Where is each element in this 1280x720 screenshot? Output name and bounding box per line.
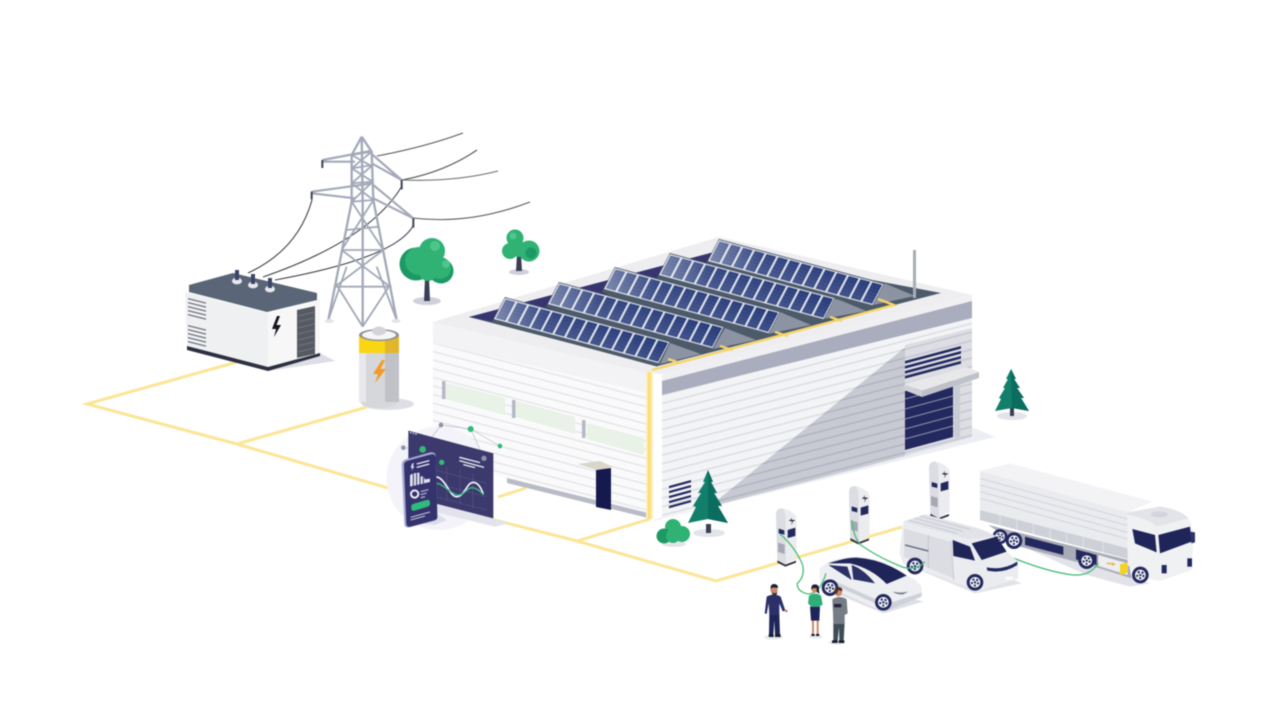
van shadow xyxy=(903,563,1022,593)
bush xyxy=(656,519,690,547)
person two xyxy=(808,584,823,638)
antenna xyxy=(913,250,916,298)
car xyxy=(819,557,922,612)
truck lights xyxy=(1162,565,1167,573)
right parapet xyxy=(662,295,972,395)
door frame xyxy=(954,374,960,438)
right wall xyxy=(662,318,972,519)
roof top xyxy=(433,237,972,374)
van wheels xyxy=(907,558,923,574)
phone shadow xyxy=(420,513,447,525)
right wall mid shade xyxy=(905,328,972,456)
wall posts xyxy=(442,381,586,438)
pine front xyxy=(688,470,728,537)
network nodes xyxy=(419,426,502,465)
charger one xyxy=(776,508,797,567)
right wall shadow xyxy=(709,336,919,507)
truck wheels xyxy=(992,529,1007,544)
entrance canopy xyxy=(578,461,613,470)
network links xyxy=(403,425,500,462)
van front stripe xyxy=(987,562,1017,572)
truck charging cable xyxy=(1012,557,1098,575)
left entrance door xyxy=(596,468,611,510)
window dots xyxy=(410,432,417,435)
van windows xyxy=(953,540,975,561)
left parapet xyxy=(433,322,648,393)
truck battery xyxy=(1098,555,1128,575)
truck cab xyxy=(1128,507,1193,581)
person one xyxy=(764,584,788,640)
window bands xyxy=(446,383,644,455)
pylon xyxy=(312,137,413,327)
left wall base xyxy=(507,478,648,518)
trailer side xyxy=(980,471,1128,559)
insulators xyxy=(232,270,275,292)
roof back navy edge xyxy=(469,251,745,323)
transformer shadow xyxy=(268,352,335,371)
charger three xyxy=(929,462,950,520)
pine right xyxy=(995,369,1029,420)
truck xyxy=(980,463,1195,583)
loading canopy xyxy=(904,367,979,397)
battery shadow xyxy=(362,398,414,410)
tree one xyxy=(400,238,454,305)
left wall xyxy=(433,343,648,517)
battery yellow band xyxy=(359,335,399,353)
wall yellow conduit xyxy=(646,371,653,519)
phone xyxy=(402,452,437,528)
loading door vent xyxy=(905,346,961,379)
wall vent lower xyxy=(669,480,691,508)
tree two xyxy=(502,230,540,275)
car windows xyxy=(828,558,907,584)
phone content xyxy=(410,461,430,520)
charger two xyxy=(849,486,870,544)
wires xyxy=(248,133,530,280)
battery body xyxy=(359,338,399,408)
ground power lines xyxy=(87,362,902,581)
energy dashboard xyxy=(387,423,509,530)
van charging cable xyxy=(852,520,925,568)
transformer xyxy=(185,270,335,371)
chart curves xyxy=(430,477,483,497)
transformer bolt icon xyxy=(272,316,281,337)
transformer left vents xyxy=(188,298,206,347)
panel supports xyxy=(660,283,915,364)
chart screen xyxy=(408,431,493,518)
building ground shadow xyxy=(650,423,995,522)
transformer roof xyxy=(189,273,317,312)
battery xyxy=(359,326,414,410)
trailer lower band xyxy=(980,510,1128,559)
battery bolt icon xyxy=(373,360,386,383)
roof yellow cable xyxy=(652,299,894,370)
solar panels xyxy=(492,239,885,367)
car shadow xyxy=(823,582,923,613)
chart text lines xyxy=(459,457,484,468)
car wheels xyxy=(822,579,838,596)
person three xyxy=(829,587,848,645)
truck under chassis xyxy=(988,525,1132,578)
battery top xyxy=(359,329,399,341)
floor shadow xyxy=(408,497,509,527)
truck windows xyxy=(1132,529,1157,552)
chart grid xyxy=(435,467,487,510)
charging scene xyxy=(764,462,1195,645)
dashboard halo xyxy=(387,427,490,530)
roof floor xyxy=(469,251,941,366)
truck shadow xyxy=(1023,547,1150,587)
building xyxy=(433,237,995,522)
trailer top xyxy=(980,463,1153,512)
car charging cable xyxy=(780,534,826,594)
loading door xyxy=(905,378,953,450)
transformer right vent xyxy=(297,306,315,358)
van xyxy=(899,514,1018,591)
transformer body xyxy=(185,292,268,370)
